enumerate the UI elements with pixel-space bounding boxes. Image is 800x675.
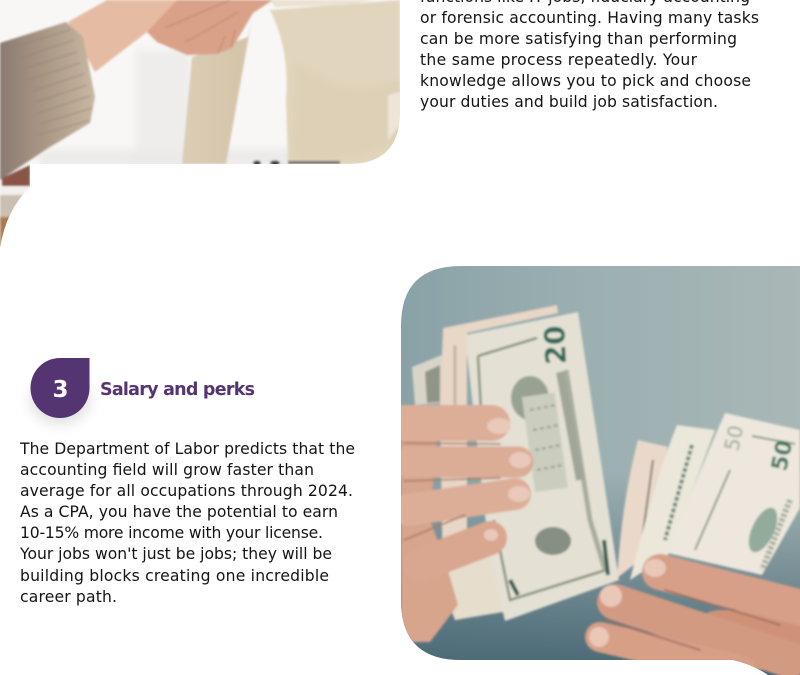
bill number 50: 50 bbox=[719, 423, 748, 453]
text block: salary description: career path. bbox=[20, 588, 117, 606]
lower left bill tab bbox=[458, 556, 504, 620]
photo: hands holding dollar bills bbox=[401, 266, 800, 675]
text block: varied duties: the same process repeatedly. Your bbox=[420, 51, 698, 69]
body in beige trousers bbox=[270, 0, 400, 164]
left hand fingers bbox=[404, 423, 518, 565]
text block: salary description bbox=[19, 440, 355, 606]
clasped hands bbox=[147, 0, 273, 55]
text block: salary description: accounting field will grow faster than bbox=[20, 461, 314, 479]
knit sleeve bbox=[0, 22, 95, 180]
text block: salary description: 10-15% more income with your license. bbox=[20, 524, 323, 542]
text block: salary description: Your jobs won't just be jobs; they will be bbox=[19, 545, 332, 563]
photo: handshake bbox=[0, 0, 400, 250]
text block: varied duties bbox=[420, 0, 759, 111]
text block: varied duties: can be more satisfying than performing bbox=[420, 30, 737, 48]
text block: salary description: average for all occupations through 2024. bbox=[20, 482, 353, 500]
left hand nails bbox=[484, 418, 531, 541]
right fan of bills bbox=[617, 440, 668, 578]
heading: salary and perks: Salary and perks bbox=[100, 380, 255, 400]
trouser leg left bbox=[182, 18, 252, 164]
window frame bbox=[138, 54, 187, 147]
number badge 3: 3 bbox=[52, 377, 69, 403]
forearm bbox=[68, 0, 180, 72]
text block: salary description: The Department of Labor predicts that the bbox=[19, 440, 355, 458]
photo: hands holding dollar bills: 50 bbox=[767, 438, 798, 473]
text block: varied duties: or forensic accounting. Having many tasks bbox=[420, 9, 759, 27]
right hand fingers bbox=[600, 572, 800, 670]
text block: salary description: building blocks creating one incredible bbox=[20, 567, 329, 585]
text block: salary description: As a CPA, you have the potential to earn bbox=[20, 503, 338, 521]
right hand nails bbox=[589, 559, 666, 647]
floor shoes bbox=[253, 160, 261, 166]
lower left strip bbox=[2, 165, 30, 186]
bill portrait building bbox=[511, 376, 549, 420]
left fan of bills bbox=[412, 355, 442, 405]
bill number 20: 20 bbox=[538, 325, 573, 365]
number badge 3 bbox=[30, 358, 90, 424]
text block: varied duties: your duties and build job satisfaction. bbox=[420, 93, 718, 111]
text block: varied duties: knowledge allows you to pick and choose bbox=[420, 72, 751, 90]
left hand palm bbox=[401, 440, 459, 644]
